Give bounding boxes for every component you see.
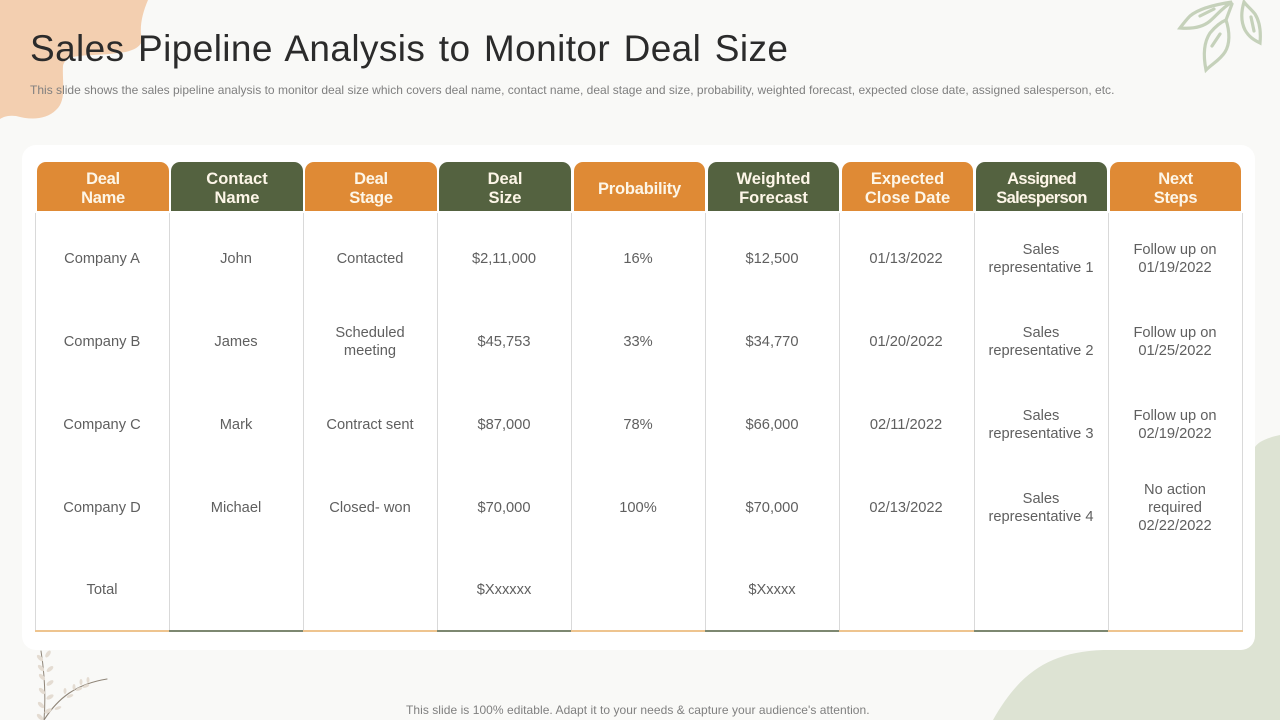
row: Company B: 33% (623, 334, 653, 350)
header: Deal Name: Deal (86, 170, 120, 188)
row: Company C: Mark (220, 417, 252, 433)
row: Company C: Contract sent (326, 417, 414, 433)
row: Total: $Xxxxxx (477, 582, 531, 598)
header: Weighted Forecast (708, 162, 839, 211)
header: Deal Stage: Stage (349, 189, 393, 207)
header: Deal Size (439, 162, 571, 211)
row: Company A: Contacted (337, 251, 403, 267)
header: Deal Name (37, 162, 169, 211)
row: Company A: Company A (64, 251, 140, 267)
row: Company D: Sales (1023, 491, 1059, 507)
header: Contact Name: Contact (206, 170, 268, 188)
subtitle: This slide shows the sales pipeline analysis to monitor deal size which covers deal name, contact name, deal stage and size, probability, weighted forecast, expected close date, assigned salesperson, etc. (30, 83, 1114, 97)
panel: table card (22, 145, 1255, 650)
row: Total (86, 582, 796, 598)
row: Company D: 100% (619, 500, 657, 516)
row: Company C: Company C (63, 417, 141, 433)
row: Company A: $2,11,000 (472, 251, 536, 267)
header: Weighted Forecast: Forecast (739, 189, 808, 207)
row: Company A: John (220, 251, 252, 267)
row: Company B: meeting (344, 343, 396, 359)
row: Company B: 01/20/2022 (869, 334, 943, 350)
title: Sales Pipeline Analysis to Monitor Deal Size (30, 28, 788, 69)
header: Deal Name: Name (81, 189, 125, 207)
row: Company B: Sales (1023, 325, 1059, 341)
header: Weighted Forecast: Weighted (737, 170, 810, 188)
header: Expected Close Date (842, 162, 973, 211)
header: Deal Stage (305, 162, 437, 211)
green blob (993, 435, 1280, 720)
row: Company C (63, 408, 1217, 442)
header: Next Steps (1110, 162, 1241, 211)
header: Probability: Probability (598, 180, 681, 198)
row: Company B: Scheduled (335, 325, 405, 341)
header: Expected Close Date: Close Date (865, 189, 950, 207)
header: Assigned Salesperson: Assigned (1007, 170, 1076, 188)
row: Company C: 02/11/2022 (870, 417, 942, 433)
header: Next Steps: Steps (1154, 189, 1197, 207)
row: Company D: $70,000 (746, 500, 798, 516)
row: Company B: Company B (64, 334, 140, 350)
row: Company C: Follow up on (1133, 408, 1217, 424)
row: Company C: Sales (1023, 408, 1059, 424)
row: Total: Total (87, 582, 117, 598)
row: Company D: No action (1144, 482, 1206, 498)
row: Company D: $70,000 (478, 500, 530, 516)
footer note: This slide is 100% editable. Adapt it to your needs & capture your audience's attention. (406, 703, 870, 717)
header: Next Steps: Next (1158, 170, 1193, 188)
header: Expected Close Date: Expected (871, 170, 944, 188)
row: Company D: 02/22/2022 (1138, 518, 1212, 534)
row: Company C: $87,000 (478, 417, 530, 433)
row: Company D: Michael (211, 500, 261, 516)
row: Company B: $45,753 (478, 334, 530, 350)
row: Total: $Xxxxx (748, 582, 796, 598)
row: Company A: Follow up on (1133, 242, 1217, 258)
row: Company A: 01/19/2022 (1138, 260, 1212, 276)
row: Company B: $34,770 (746, 334, 798, 350)
row: Company D: 02/13/2022 (869, 500, 943, 516)
row: Company B: 01/25/2022 (1138, 343, 1212, 359)
row: Company A: Sales (1023, 242, 1059, 258)
header: Deal Size: Size (488, 189, 522, 207)
row: Company A: 16% (623, 251, 653, 267)
row: Company A: 01/13/2022 (869, 251, 943, 267)
row: Company C: representative 3 (988, 426, 1094, 442)
row: Company D (63, 482, 1212, 534)
header: Contact Name: Name (215, 189, 259, 207)
row: Company B: Follow up on (1133, 325, 1217, 341)
row: Company C: 02/19/2022 (1138, 426, 1212, 442)
row: Company B: James (214, 334, 258, 350)
row: Company D: Company D (63, 500, 141, 516)
row: Company B: representative 2 (988, 343, 1094, 359)
icon: leaves top right (1180, 2, 1260, 70)
row: Company D: Closed- won (329, 500, 411, 516)
icon: twig bottom left (36, 650, 107, 720)
header: Deal Stage: Deal (354, 170, 388, 188)
table header row (37, 162, 1241, 211)
row: Company C: 78% (623, 417, 653, 433)
row: Company D: required (1148, 500, 1202, 516)
header: Contact Name (171, 162, 303, 211)
row: Company B (64, 325, 1217, 359)
row: Company A: $12,500 (746, 251, 798, 267)
header: Probability (574, 162, 705, 211)
row: Company D: representative 4 (988, 509, 1094, 525)
row: Company C: $66,000 (746, 417, 798, 433)
row: Company A: representative 1 (988, 260, 1094, 276)
header: Assigned Salesperson: Salesperson (996, 189, 1087, 207)
header: Assigned Salesperson (976, 162, 1107, 211)
header: Deal Size: Deal (488, 170, 522, 188)
peach blob (0, 0, 148, 119)
row: Company A (64, 242, 1217, 276)
